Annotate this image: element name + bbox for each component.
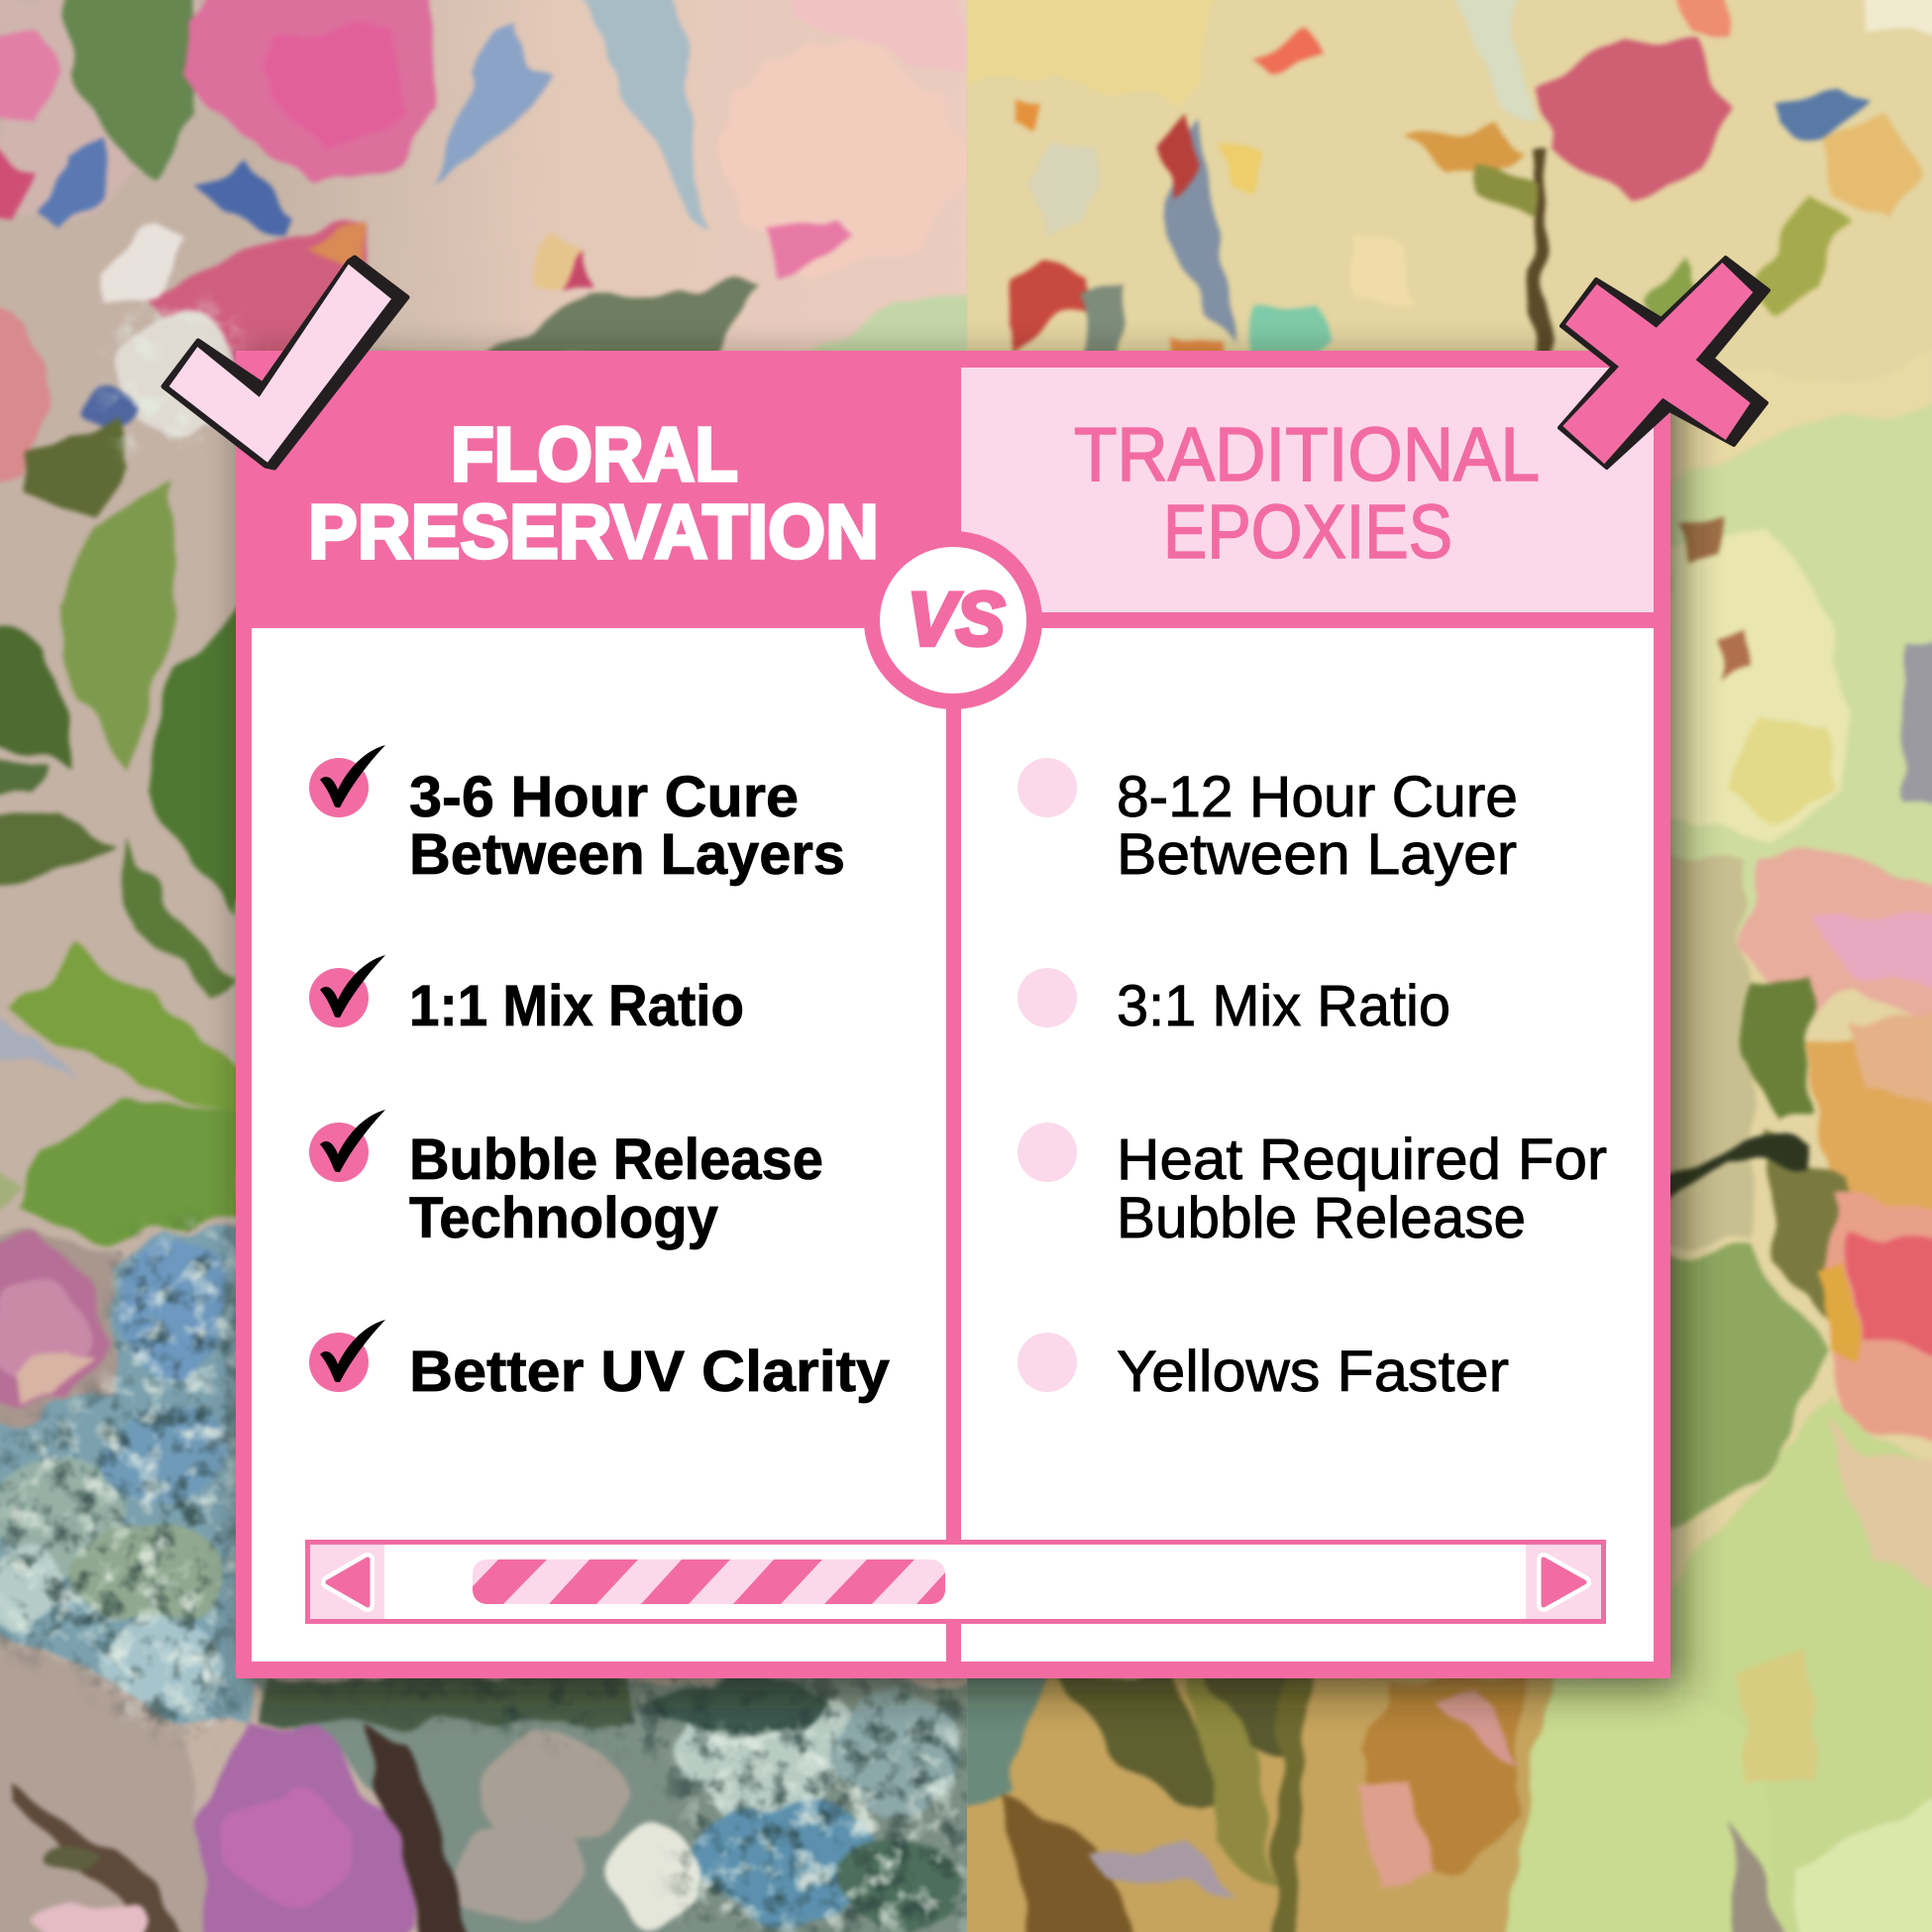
item: better uv clarity: Better UV Clarity xyxy=(409,1340,890,1404)
heading: traditional epoxies: TRADITIONAL xyxy=(1074,412,1540,497)
item: heat required: Bubble Release xyxy=(1117,1186,1526,1250)
heading: traditional epoxies: EPOXIES xyxy=(1163,489,1452,575)
right header panel xyxy=(961,368,1654,612)
rosebud xyxy=(0,1237,106,1405)
heading: floral preservation: PRESERVATION xyxy=(308,489,879,575)
heading: floral preservation: FLORAL xyxy=(451,412,738,497)
icon: large x mark xyxy=(1559,258,1769,468)
scrollbar xyxy=(307,1542,1603,1621)
hydrangea and white flower mottling xyxy=(0,314,967,1932)
item: heat required: Heat Required For xyxy=(1117,1127,1607,1192)
icon: right arrow xyxy=(1544,1559,1584,1605)
item: 8-12 hour cure xyxy=(1018,758,1518,887)
right half: yellowed resin with flowers xyxy=(912,0,1932,1932)
item: bubble release technology xyxy=(309,1110,823,1250)
icon: left arrow xyxy=(328,1559,368,1605)
vs badge xyxy=(864,531,1042,709)
scrollbar thumb with stripes xyxy=(473,1559,945,1604)
vs badge: VS xyxy=(908,578,1005,662)
item: yellows faster xyxy=(1018,1333,1509,1404)
item: 3-6 hour cure: Between Layers xyxy=(409,822,845,887)
left column list xyxy=(309,745,890,1404)
panel drop shadow xyxy=(248,363,1682,1690)
item: 3-6 hour cure xyxy=(309,745,845,887)
heading: traditional epoxies xyxy=(1074,412,1540,575)
heading: floral preservation xyxy=(308,412,879,575)
comparison panel xyxy=(236,351,1670,1678)
item: yellows faster: Yellows Faster xyxy=(1117,1340,1509,1404)
item: 1:1 mix ratio: 1:1 Mix Ratio xyxy=(409,974,744,1038)
item: 1:1 mix ratio xyxy=(309,955,744,1038)
icon: large check mark xyxy=(163,258,407,468)
item: bubble release technology: Technology xyxy=(409,1186,718,1250)
panel frame xyxy=(236,351,1670,1678)
item: 8-12 hour cure: Between Layer xyxy=(1117,822,1517,887)
item: 3-6 hour cure: 3-6 Hour Cure xyxy=(409,765,799,829)
item: bubble release technology: Bubble Release xyxy=(409,1127,823,1192)
item: 3:1 mix ratio: 3:1 Mix Ratio xyxy=(1117,974,1450,1038)
left body panel xyxy=(252,628,946,1662)
right column list xyxy=(1018,758,1607,1404)
item: 8-12 hour cure: 8-12 Hour Cure xyxy=(1117,765,1518,829)
left half: clear resin with flowers xyxy=(0,0,1035,1932)
item: better uv clarity xyxy=(309,1320,890,1404)
item: heat required xyxy=(1018,1123,1607,1250)
right body panel xyxy=(961,628,1654,1662)
